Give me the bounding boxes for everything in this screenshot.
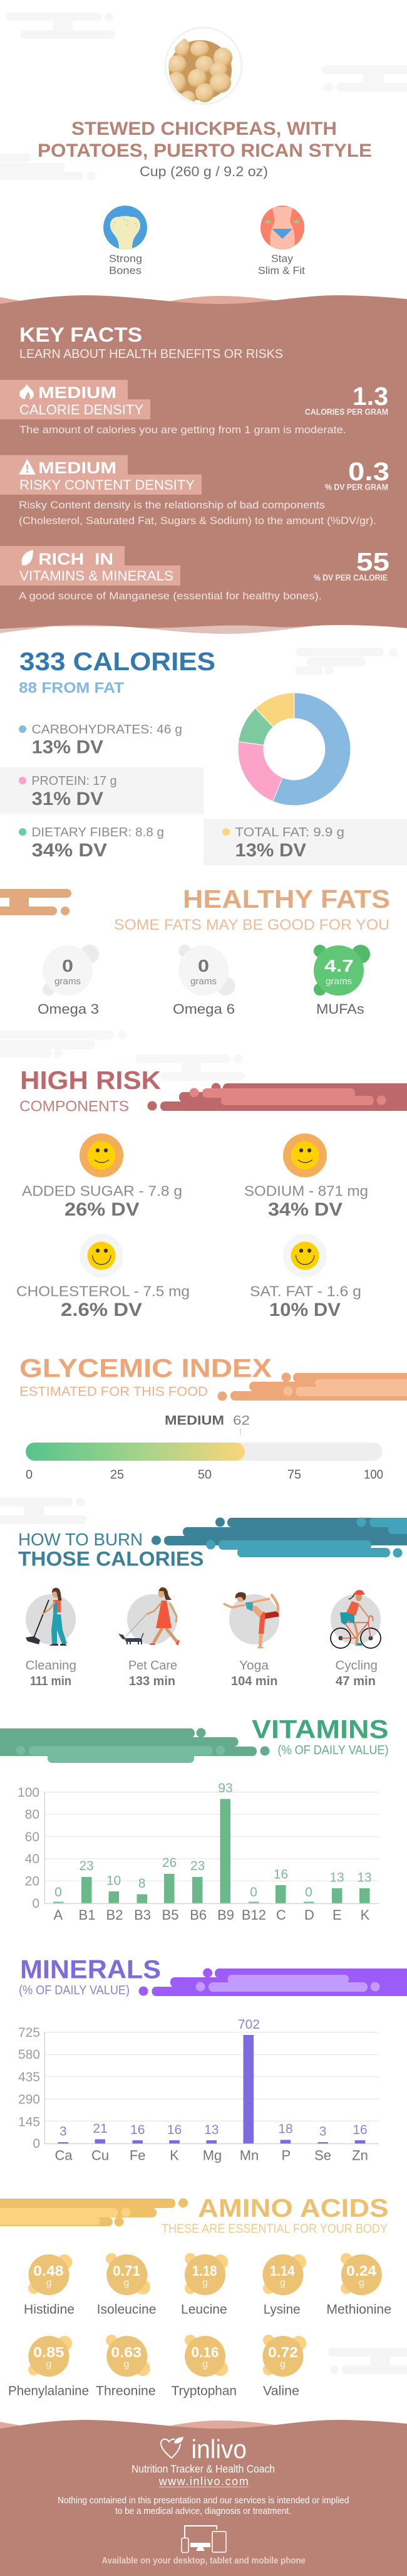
icon: strong bones	[103, 206, 147, 250]
bar chart: minerals: 145	[18, 2115, 40, 2130]
amino acid: valine: Valine	[263, 2384, 299, 2399]
bar chart: vitamins: 0	[32, 1896, 39, 1911]
fact: calorie density: CALORIES PER GRAM	[305, 407, 388, 416]
amino acid: leucine: 1.18	[192, 2263, 217, 2279]
fact: calorie density	[0, 380, 388, 436]
logo: inlivo: inlivo	[192, 2434, 247, 2464]
icon: devices	[182, 2526, 226, 2553]
legend: dietary fiber	[19, 826, 164, 861]
amino acid: histidine: 0.48	[33, 2263, 64, 2279]
fact: calorie density: MEDIUM	[38, 383, 116, 402]
benefit label: slim and fit: Stay	[271, 253, 293, 265]
legend: total fat: 13% DV	[235, 840, 306, 861]
bar chart: vitamins: 0	[305, 1885, 312, 1900]
decorative cloud: amino acids	[328, 2348, 407, 2374]
subheading: glycemic index: ESTIMATED FOR THIS FOOD	[19, 1385, 208, 1399]
bar chart: vitamins: B3	[134, 1907, 151, 1923]
amino acid: threonine: g	[124, 2359, 129, 2370]
activity: pet care: Pet Care	[128, 1659, 177, 1673]
heading: glycemic index: GLYCEMIC INDEX	[19, 1354, 272, 1383]
bar chart: minerals: K	[170, 2148, 179, 2163]
glycemic index gauge: 100	[364, 1468, 383, 1482]
legend: protein: PROTEIN: 17 g	[31, 774, 116, 788]
legend: protein	[0, 767, 204, 814]
risk: sodium: 34% DV	[268, 1199, 343, 1220]
bar chart: vitamins: 93	[218, 1781, 233, 1795]
activity: cleaning: 111 min	[30, 1674, 71, 1688]
fact: risky content density: 0.3	[348, 457, 389, 486]
decorative cloud: burn	[0, 1498, 87, 1524]
legend: dietary fiber: 34% DV	[31, 840, 107, 861]
amino acid: lysine: g	[280, 2278, 286, 2288]
decorative bars: healthy fats	[0, 889, 71, 915]
donut chart: calorie breakdown	[238, 693, 351, 806]
bar chart: vitamins: C	[276, 1907, 286, 1923]
risk: saturated fat: 10% DV	[269, 1300, 341, 1320]
amino acid: methionine: 0.24	[346, 2263, 376, 2279]
bar chart: vitamins: 23	[79, 1859, 94, 1873]
benefit label: strong bones	[109, 253, 142, 276]
bar chart: minerals: 16	[353, 2123, 368, 2137]
subheading: minerals: (% OF DAILY VALUE)	[19, 1984, 130, 1997]
bar chart: vitamins: 80	[25, 1807, 39, 1822]
bar chart: vitamins	[18, 1781, 379, 1923]
amino acid: threonine	[96, 2335, 156, 2399]
heading: high risk: HIGH RISK	[20, 1066, 161, 1095]
bar chart: minerals: Se	[314, 2148, 331, 2163]
amino acid: isoleucine	[97, 2253, 157, 2317]
benefit label: strong bones: Bones	[109, 265, 142, 276]
bar chart: minerals: 3	[319, 2125, 326, 2139]
risk: cholesterol: 2.6% DV	[61, 1300, 142, 1320]
bar chart: minerals: 725	[18, 2026, 40, 2040]
decorative clouds: high risk	[0, 1031, 244, 1081]
legend: carbohydrates: CARBOHYDRATES: 46 g	[31, 723, 182, 737]
availability note: Available on your desktop, tablet and mobile phone	[101, 2555, 306, 2566]
amino acid: tryptophan: 0.16	[192, 2344, 219, 2360]
amino acid: lysine	[263, 2254, 306, 2317]
amino acid: methionine: Methionine	[326, 2303, 391, 2317]
benefit label: slim and fit: Slim & Fit	[258, 265, 305, 276]
amino acid: methionine: g	[359, 2278, 364, 2288]
fact: risky content density: Risky Content density is the relationship of bad components	[19, 499, 325, 511]
heading: amino acids: AMINO ACIDS	[198, 2194, 388, 2222]
fat: omega 6: 0	[198, 956, 209, 975]
fact: risky content density: % DV PER GRAM	[325, 483, 388, 492]
bar chart: vitamins: 8	[138, 1876, 146, 1891]
bar chart: vitamins: 0	[250, 1885, 257, 1900]
activity: yoga: Yoga	[239, 1659, 269, 1673]
amino acid: lysine: Lysine	[264, 2303, 301, 2317]
fat: omega 3	[38, 945, 99, 1017]
fact: rich in vitamins and minerals: VITAMINS & MINERALS	[19, 568, 173, 584]
activity: cycling: 47 min	[336, 1674, 376, 1688]
amino acid: tryptophan: Tryptophan	[172, 2384, 237, 2399]
legend: dietary fiber: DIETARY FIBER: 8.8 g	[31, 826, 164, 839]
decorative bars: vitamins	[0, 1728, 269, 1763]
amino acid: isoleucine: g	[124, 2278, 129, 2288]
fat: MUFAs	[314, 945, 370, 1017]
fact: rich in vitamins and minerals: RICH IN	[38, 550, 113, 569]
bar chart: vitamins: 10	[106, 1874, 121, 1888]
amino acid: tryptophan	[172, 2335, 237, 2399]
fact: risky content density: (Cholesterol, Saturated Fat, Sugars & Sodium) to the amount (%DV/gr).	[19, 515, 376, 527]
heading: calories: 333 CALORIES	[19, 647, 215, 676]
bar chart: minerals: 16	[130, 2123, 145, 2137]
amino acid: leucine: g	[202, 2278, 208, 2288]
glycemic index gauge: 50	[198, 1468, 212, 1482]
glycemic index gauge	[26, 1414, 383, 1482]
risk: added sugar: ADDED SUGAR - 7.8 g	[22, 1183, 182, 1199]
amino acid: phenylalanine	[8, 2336, 89, 2399]
risk: added sugar: 26% DV	[64, 1199, 140, 1220]
icon: slim and fit	[260, 206, 304, 251]
bar chart: vitamins: 60	[25, 1830, 39, 1844]
benefit label: slim and fit	[258, 253, 305, 276]
subheading: amino acids: THESE ARE ESSENTIAL FOR YOUR BODY	[162, 2222, 388, 2236]
subheading: healthy fats: SOME FATS MAY BE GOOD FOR YOU	[114, 917, 389, 933]
glycemic index gauge: 62	[233, 1414, 250, 1428]
risk: sodium	[244, 1133, 368, 1220]
bar chart: minerals: 435	[18, 2070, 40, 2084]
fact: risky content density	[0, 455, 389, 527]
heading: healthy fats: HEALTHY FATS	[183, 885, 390, 913]
subheading: calories from fat: 88 FROM FAT	[19, 680, 124, 697]
logo: inlivo	[161, 2434, 247, 2464]
amino acid: threonine: Threonine	[96, 2384, 156, 2399]
bar chart: minerals: Mn	[240, 2148, 259, 2163]
bar chart: minerals: 0	[33, 2137, 40, 2151]
risk: cholesterol: CHOLESTEROL - 7.5 mg	[16, 1283, 190, 1300]
fat: omega 6: grams	[190, 976, 217, 987]
bar chart: minerals: Cu	[91, 2148, 109, 2163]
food photo: chickpeas	[165, 28, 242, 105]
risk: saturated fat	[250, 1234, 361, 1320]
fact: risky content density: MEDIUM	[38, 458, 116, 477]
decorative bars: burn calories	[152, 1517, 407, 1557]
panel: footer	[0, 2420, 407, 2576]
decorative bars: minerals	[139, 1969, 407, 1996]
fact: calorie density: 1.3	[353, 382, 388, 411]
amino acid: histidine: g	[46, 2278, 51, 2288]
subheading: components: COMPONENTS	[19, 1098, 129, 1115]
amino acid: phenylalanine: Phenylalanine	[8, 2384, 89, 2399]
risk: added sugar	[22, 1133, 182, 1220]
subheading: key facts: LEARN ABOUT HEALTH BENEFITS OR RISKS	[19, 347, 283, 361]
activity: pet care	[118, 1587, 180, 1688]
fat: omega 3: 0	[62, 956, 73, 975]
tagline: Nutrition Tracker & Health Coach	[131, 2463, 275, 2475]
heading: vitamins: VITAMINS	[252, 1715, 388, 1744]
amino acid: isoleucine: 0.71	[113, 2263, 140, 2279]
amino acid: phenylalanine: g	[46, 2359, 51, 2370]
fact: calorie density: CALORIE DENSITY	[19, 402, 143, 418]
decorative bars: glycemic index	[218, 1373, 407, 1401]
bar chart: vitamins: 20	[25, 1874, 39, 1888]
panel: key facts	[0, 295, 407, 634]
glycemic index gauge: 25	[110, 1468, 124, 1482]
fact: rich in vitamins and minerals	[0, 546, 389, 602]
glycemic index gauge: 75	[287, 1468, 301, 1482]
glycemic index gauge: 0	[26, 1468, 33, 1482]
bar chart: vitamins: B1	[79, 1907, 95, 1923]
amino acid: valine: g	[280, 2359, 286, 2370]
amino acid: isoleucine: Isoleucine	[97, 2303, 157, 2317]
activity: cleaning	[26, 1588, 76, 1688]
activity: cycling	[331, 1590, 381, 1688]
bar chart: vitamins: B2	[106, 1907, 123, 1923]
bar chart: minerals: 702	[238, 2017, 260, 2032]
bar chart: vitamins: 16	[274, 1868, 288, 1882]
bar chart: minerals: Ca	[54, 2148, 73, 2163]
title: STEWED CHICKPEAS, WITH	[71, 118, 337, 139]
bar chart: vitamins: A	[53, 1907, 63, 1923]
fact: rich in vitamins and minerals: A good source of Manganese (essential for healthy bones).	[19, 590, 322, 602]
bar chart: vitamins: D	[304, 1907, 314, 1923]
decorative clouds: header	[0, 13, 407, 181]
title: POTATOES, PUERTO RICAN STYLE	[38, 140, 372, 161]
heading: how to burn those calories: THOSE CALORIES	[18, 1548, 204, 1570]
decorative bars: amino acids	[0, 2198, 188, 2227]
glycemic index gauge: MEDIUM	[165, 1414, 224, 1428]
fact: calorie density: The amount of calories you are getting from 1 gram is moderate.	[19, 424, 346, 436]
bar chart: minerals: Zn	[352, 2148, 368, 2163]
risk: saturated fat: SAT. FAT - 1.6 g	[250, 1283, 361, 1300]
disclaimer: to be a medical advice, diagnosis or treatment.	[115, 2506, 291, 2516]
amino acid: valine: 0.72	[268, 2344, 298, 2360]
amino acid: histidine	[24, 2254, 75, 2317]
website link: www.inlivo.com	[158, 2475, 249, 2488]
bar chart: vitamins: 13	[357, 1871, 372, 1885]
amino acid: leucine	[181, 2253, 228, 2317]
bar chart: minerals: Fe	[130, 2148, 146, 2163]
amino acid: histidine: Histidine	[24, 2303, 75, 2317]
decorative bars: high risk	[148, 1083, 407, 1111]
bar chart: vitamins: E	[332, 1907, 342, 1923]
bar chart: vitamins: 40	[25, 1852, 39, 1866]
amino acid: valine	[263, 2335, 306, 2399]
heading: minerals: MINERALS	[20, 1955, 161, 1984]
activity: cycling: Cycling	[336, 1659, 378, 1673]
serving size: Cup (260 g / 9.2 oz)	[140, 164, 268, 179]
bar chart: vitamins: K	[361, 1907, 370, 1923]
bar chart: vitamins: 26	[162, 1856, 177, 1870]
activity: yoga	[224, 1592, 279, 1688]
bar chart: minerals: 18	[278, 2122, 293, 2137]
amino acid: phenylalanine: 0.85	[33, 2344, 64, 2360]
heading: how to burn those calories: HOW TO BURN	[18, 1530, 143, 1549]
fat: omega 3: Omega 3	[38, 1001, 99, 1017]
heading: key facts: KEY FACTS	[19, 323, 142, 346]
legend: carbohydrates	[19, 723, 182, 758]
legend: carbohydrates: 13% DV	[31, 737, 103, 758]
benefit label: strong bones: Strong	[109, 253, 142, 265]
amino acid: methionine	[326, 2253, 391, 2317]
subheading: vitamins: (% OF DAILY VALUE)	[278, 1743, 388, 1757]
bar chart: minerals: 16	[167, 2123, 182, 2137]
bar chart: vitamins: B5	[162, 1907, 178, 1923]
activity: pet care: 133 min	[129, 1674, 175, 1688]
fact: rich in vitamins and minerals: 55	[356, 547, 389, 576]
heading: how to burn those calories	[18, 1530, 204, 1570]
amino acid: leucine: Leucine	[181, 2303, 227, 2317]
bar chart: vitamins: B12	[242, 1907, 266, 1923]
decorative cloud: calories	[296, 648, 398, 675]
bar chart: minerals	[18, 2017, 379, 2163]
bar chart: minerals: P	[281, 2148, 291, 2163]
fat: omega 6: Omega 6	[173, 1001, 235, 1017]
disclaimer: Nothing contained in this presentation and our services is intended or implied	[58, 2495, 349, 2506]
bar chart: minerals: 3	[59, 2125, 67, 2139]
bar chart: minerals: 13	[204, 2123, 219, 2137]
bar chart: minerals: 290	[18, 2093, 40, 2107]
bar chart: vitamins: 23	[190, 1859, 205, 1873]
fat: MUFAs: MUFAs	[316, 1001, 364, 1017]
bar chart: vitamins: 0	[54, 1885, 62, 1900]
fat: omega 3: grams	[54, 976, 81, 987]
fact: rich in vitamins and minerals: % DV PER CALORIE	[314, 573, 388, 582]
activity: yoga: 104 min	[231, 1674, 278, 1688]
risk: sodium: SODIUM - 871 mg	[244, 1183, 368, 1199]
legend: total fat: TOTAL FAT: 9.9 g	[235, 826, 344, 839]
title	[38, 118, 372, 161]
bar chart: vitamins: B9	[217, 1907, 234, 1923]
disclaimer	[58, 2495, 349, 2516]
bar chart: minerals: Mg	[203, 2148, 222, 2163]
fat: MUFAs: 4.7	[324, 956, 354, 975]
bar chart: minerals: 21	[93, 2121, 108, 2136]
amino acid: lysine: 1.14	[270, 2263, 295, 2279]
fat: omega 6	[173, 945, 235, 1017]
bar chart: vitamins: B6	[190, 1907, 207, 1923]
legend: protein: 31% DV	[31, 789, 103, 809]
amino acid: threonine: 0.63	[111, 2344, 142, 2360]
activity: cleaning: Cleaning	[26, 1659, 76, 1673]
risk: cholesterol	[16, 1234, 190, 1320]
bar chart: minerals: 580	[18, 2048, 40, 2062]
legend: total fat	[204, 819, 407, 865]
fact: risky content density: RISKY CONTENT DENSITY	[19, 477, 195, 493]
fat: MUFAs: grams	[326, 976, 352, 987]
amino acid: tryptophan: g	[202, 2359, 208, 2370]
bar chart: vitamins: 100	[18, 1785, 39, 1800]
bar chart: vitamins: 13	[329, 1871, 344, 1885]
